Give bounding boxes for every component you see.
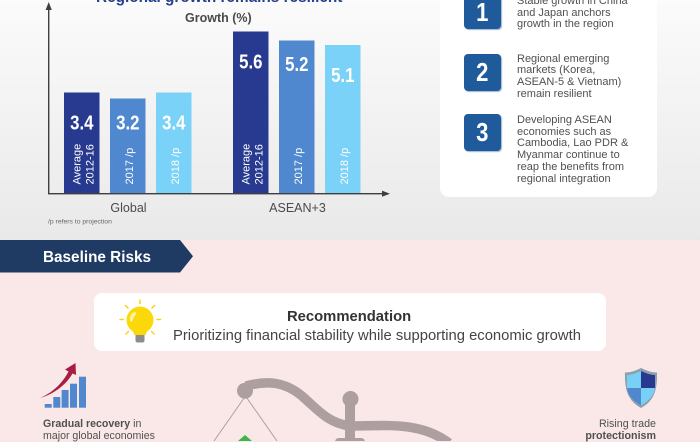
text: point 1: and Japan anchors [517,7,611,19]
icon: number 2 [464,54,501,91]
axis labels: Global [110,201,147,215]
text: point 1 [517,0,628,30]
heading banner: Baseline Risks [0,240,193,272]
bars: Global [64,92,192,193]
footnote: /p refers to projection [48,218,112,225]
bars: ASEAN+3: 5.2 [285,52,308,75]
text: rising trade protectionism: Rising trade [599,418,656,430]
bars: Global: 3.4 [162,111,186,134]
panel: regional points [440,0,657,197]
bars: ASEAN+3: 5.6 [239,50,262,73]
text: gradual recovery: major global economies [43,430,155,442]
text: point 3: Developing ASEAN [517,114,612,126]
text: point 3 [517,114,628,185]
text: rising trade protectionism: protectionism [585,430,656,442]
axis labels: ASEAN+3 [269,201,326,215]
panel: recommendation [94,293,606,351]
bars: ASEAN+3: 2018 /p [339,148,351,184]
text: point 2: markets (Korea, [517,64,595,76]
text: point 2 [517,52,621,100]
text: point 1: growth in the region [517,18,614,30]
text: gradual recovery: Gradual recovery in [43,418,141,430]
bars: ASEAN+3: Average [240,144,252,184]
bars: Global: 2018 /p [170,148,182,184]
icon: shield [624,368,657,408]
bars: ASEAN+3: 2017 /p [293,148,305,184]
bars: Global: 2017 /p [124,148,136,184]
icon: number 1 [464,0,501,29]
text: point 3: reap the benefits from [517,161,624,173]
bars: ASEAN+3: 2012-16 [253,144,265,184]
text: gradual recovery [43,418,155,442]
icon: balance scale [214,378,452,441]
text: point 3: Cambodia, Lao PDR & [517,137,628,149]
icon: number 3: 3 [476,117,489,147]
bars: Global: 3.4 [70,111,94,134]
chart subtitle: Growth (%) [185,11,252,25]
recommendation text: Prioritizing financial stability while supporting economic growth [173,328,581,344]
text: point 2: ASEAN-5 & Vietnam) [517,76,621,88]
axis labels [110,201,326,215]
icon: number 2: 2 [476,57,489,87]
top section background [0,0,700,240]
text: point 2: remain resilient [517,88,592,100]
bars: Global: Average [72,144,84,184]
text: point 2: Regional emerging [517,52,609,64]
pink section background [0,240,700,441]
chart axes [46,2,390,197]
bar chart [46,2,390,225]
bars: ASEAN+3: 5.1 [331,63,354,86]
icon: rising bar chart [40,363,86,408]
text: point 3: economies such as [517,126,611,138]
heading: Baseline Risks: Baseline Risks [43,249,151,266]
text: point 3: regional integration [517,173,611,185]
bars: ASEAN+3 [233,32,360,193]
bars: Global: 2012-16 [84,144,96,184]
recommendation heading: Recommendation [287,309,411,325]
text: rising trade protectionism [585,418,656,442]
icon: number 3 [464,114,501,151]
text: point 3: Myanmar continue to [517,149,620,161]
icon: light bulb [119,299,162,342]
bars: Global: 3.2 [116,111,139,134]
